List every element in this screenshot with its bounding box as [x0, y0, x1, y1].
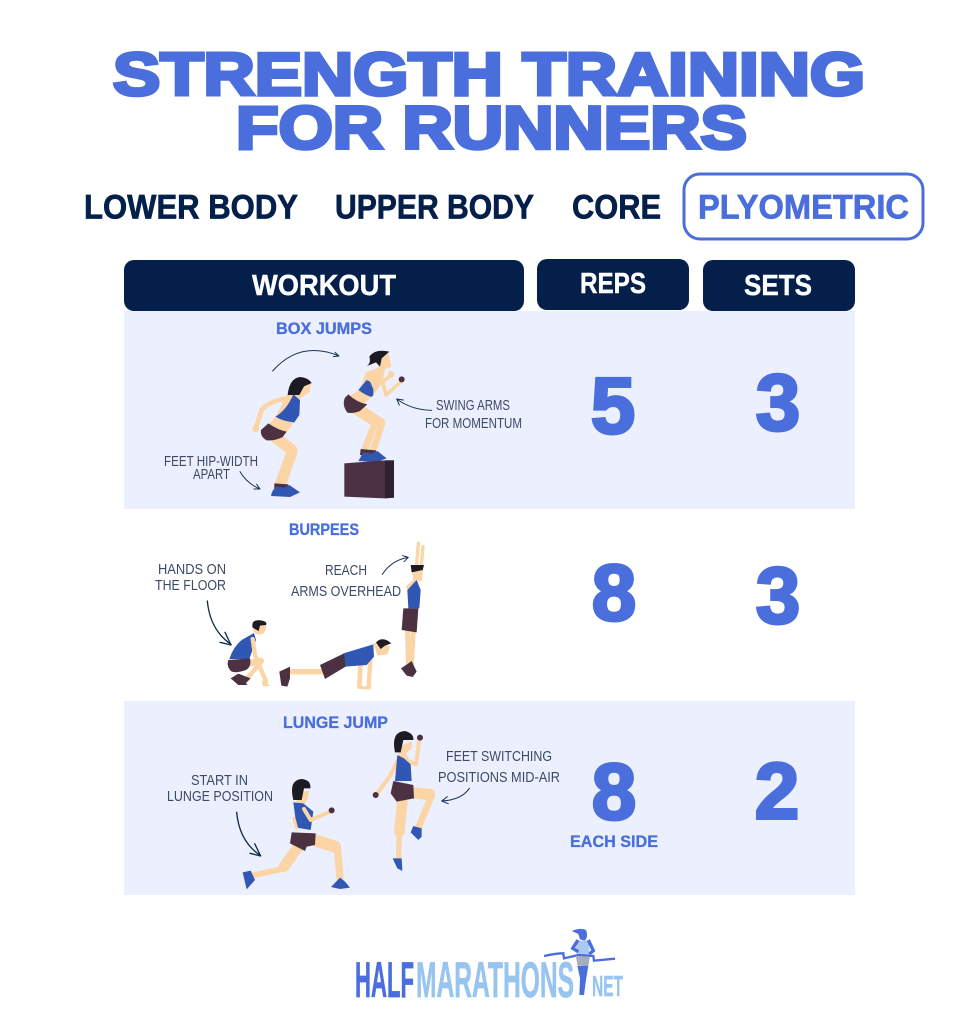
row: lunge jump: 8 [592, 747, 636, 836]
table header: SETS [744, 270, 812, 302]
row background: lunge jump [124, 701, 855, 895]
row: lunge jump: LUNGE POSITION [167, 789, 273, 805]
row: burpees: 8 [592, 548, 636, 637]
category tabs [84, 174, 923, 239]
table header: REPS [580, 268, 646, 300]
row: lunge jump: START IN [191, 773, 248, 789]
row: burpees: REACH [325, 563, 367, 579]
logo: NET [592, 971, 623, 1003]
title [113, 41, 865, 162]
row: lunge jump: FEET SWITCHING [446, 749, 552, 765]
logo: HALF [355, 952, 414, 1008]
row: burpees: ARMS OVERHEAD [291, 584, 401, 600]
row: lunge jump: POSITIONS MID-AIR [438, 770, 560, 786]
title: FOR RUNNERS [236, 94, 747, 162]
table header [124, 259, 855, 311]
row: box jumps: APART [193, 467, 230, 483]
row: box jumps: BOX JUMPS [276, 320, 372, 338]
row: box jumps: FEET HIP-WIDTH [164, 454, 258, 470]
row: box jumps: SWING ARMS [436, 398, 510, 414]
category tabs: LOWER BODY [84, 188, 298, 226]
row: lunge jump: EACH SIDE [570, 833, 658, 851]
logo: MARATHONS [416, 952, 574, 1008]
row: box jumps: FOR MOMENTUM [425, 416, 522, 432]
row: burpees: THE FLOOR [155, 578, 226, 594]
illustration: burpees [207, 543, 424, 690]
category tabs: PLYOMETRIC [698, 188, 909, 226]
illustration: lunge jump [237, 731, 469, 889]
logo [355, 929, 623, 1008]
row: lunge jump: 2 [755, 746, 799, 836]
row: burpees: HANDS ON [158, 562, 226, 578]
table header: WORKOUT [252, 270, 396, 302]
icon: runner [544, 929, 615, 995]
row background: box jumps [124, 311, 855, 509]
row: burpees: BURPEES [289, 521, 359, 539]
row: lunge jump: LUNGE JUMP [283, 714, 388, 732]
row: box jumps [164, 320, 800, 498]
category tabs: CORE [572, 188, 661, 226]
illustration: box jump [240, 351, 432, 498]
category tabs: UPPER BODY [335, 188, 534, 226]
title: STRENGTH TRAINING [113, 41, 865, 108]
row: box jumps: 5 [591, 361, 635, 450]
row: burpees [155, 521, 800, 690]
row: lunge jump [167, 714, 799, 889]
row: burpees: 3 [756, 551, 800, 640]
row: box jumps: 3 [756, 358, 800, 447]
